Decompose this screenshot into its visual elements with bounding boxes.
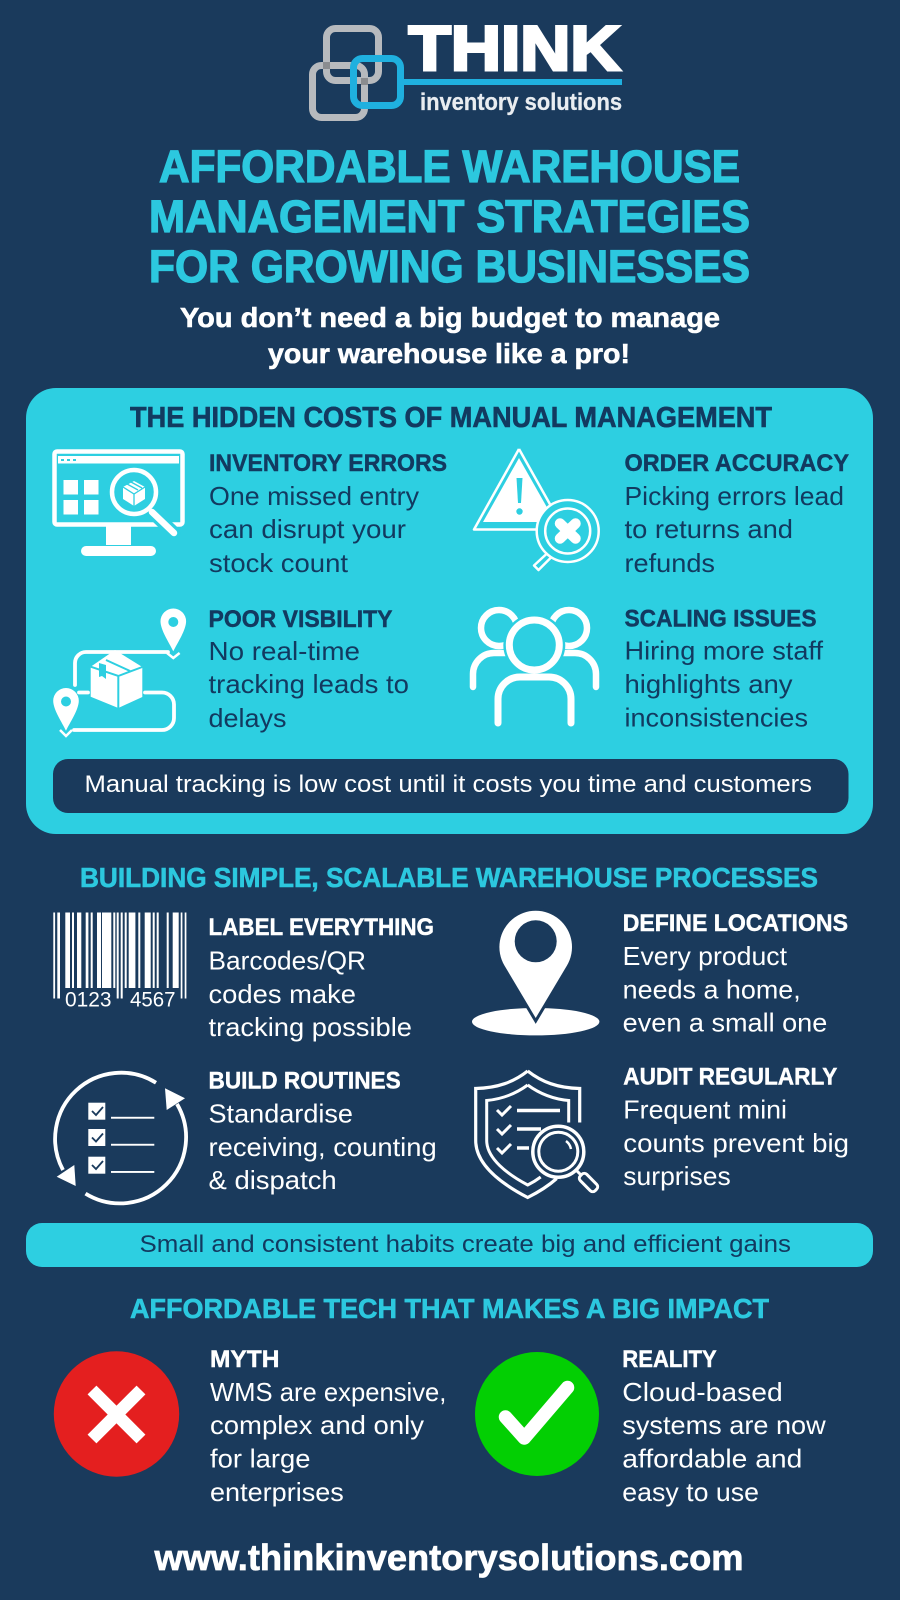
icon: warning triangle with magnifier xyxy=(474,449,599,570)
item: define locations xyxy=(623,910,848,1038)
subtitle: your warehouse like a pro! xyxy=(268,338,630,369)
callout: manual tracking xyxy=(53,759,848,813)
item: reality: REALITY xyxy=(622,1346,717,1373)
logo tagline: inventory solutions xyxy=(420,89,622,116)
item: inventory errors: can disrupt your xyxy=(209,514,406,544)
item: define locations: needs a home, xyxy=(623,974,801,1004)
item: audit regularly: AUDIT REGULARLY xyxy=(623,1064,837,1090)
item: label everything: Barcodes/QR xyxy=(208,946,366,976)
item: myth: WMS are expensive, xyxy=(210,1377,446,1407)
item: scaling issues: highlights any xyxy=(624,669,792,699)
icon: red cross xyxy=(54,1351,179,1477)
icon: barcode: 0123 xyxy=(65,988,112,1012)
item: inventory errors: One missed entry xyxy=(209,481,419,511)
item: order accuracy: Picking errors lead xyxy=(624,481,844,511)
icon: location pin on base xyxy=(472,911,599,1035)
item: reality: easy to use xyxy=(622,1477,759,1507)
subtitle: You don’t need a big budget to manage xyxy=(180,302,720,333)
item: order accuracy: refunds xyxy=(624,548,715,578)
title: AFFORDABLE WAREHOUSE xyxy=(159,141,740,192)
callout: manual tracking: Manual tracking is low cost until it costs you time and customers xyxy=(84,771,812,798)
item: build routines: Standardise xyxy=(208,1098,353,1128)
item: define locations: even a small one xyxy=(623,1008,827,1038)
item: audit regularly xyxy=(623,1064,849,1191)
item: reality xyxy=(622,1346,826,1507)
item: build routines xyxy=(208,1068,437,1195)
callout: small and consistent habits xyxy=(26,1223,873,1267)
item: poor visibility: POOR VISBILITY xyxy=(208,606,392,633)
item: myth: complex and only xyxy=(210,1410,424,1440)
section heading: BUILDING SIMPLE, SCALABLE WAREHOUSE PROCESSES xyxy=(80,862,818,893)
item: label everything xyxy=(208,914,434,1042)
callout: small and consistent habits: Small and consistent habits create big and efficient gains xyxy=(140,1231,791,1258)
item: order accuracy xyxy=(624,450,849,578)
item: inventory errors xyxy=(209,450,447,578)
panel heading: THE HIDDEN COSTS OF MANUAL MANAGEMENT xyxy=(130,402,772,434)
section: affordable tech xyxy=(54,1293,826,1507)
icon: monitor with magnifier xyxy=(54,452,182,556)
item: define locations: Every product xyxy=(623,941,788,971)
title xyxy=(149,141,750,292)
item: inventory errors: INVENTORY ERRORS xyxy=(209,450,447,477)
item: label everything: codes make xyxy=(208,979,356,1009)
section heading: AFFORDABLE TECH THAT MAKES A BIG IMPACT xyxy=(130,1293,769,1324)
title: FOR GROWING BUSINESSES xyxy=(149,241,750,292)
item: poor visibility: delays xyxy=(208,703,286,733)
item: define locations: DEFINE LOCATIONS xyxy=(623,910,848,937)
item: build routines: receiving, counting xyxy=(208,1132,437,1162)
item: reality: affordable and xyxy=(622,1444,802,1474)
icon: group of people xyxy=(473,610,596,723)
item: poor visibility xyxy=(208,606,409,733)
item: reality: Cloud-based xyxy=(622,1377,783,1407)
item: audit regularly: Frequent mini xyxy=(623,1094,787,1124)
item: reality: systems are now xyxy=(622,1410,826,1440)
item: myth xyxy=(210,1346,446,1507)
website URL: www.thinkinventorysolutions.com xyxy=(153,1537,744,1578)
item: build routines: & dispatch xyxy=(208,1165,337,1195)
subtitle xyxy=(180,302,720,369)
item: order accuracy: to returns and xyxy=(624,514,793,544)
icon: shield checklist with magnifier xyxy=(476,1071,599,1198)
logo wordmark: THINK xyxy=(408,14,620,84)
item: myth: enterprises xyxy=(210,1477,344,1507)
item: order accuracy: ORDER ACCURACY xyxy=(624,450,849,477)
item: scaling issues: inconsistencies xyxy=(624,702,808,732)
icon: barcode: 4567 xyxy=(130,988,176,1012)
icon: checklist in cycle arrows xyxy=(55,1073,186,1203)
section: building simple, scalable processes xyxy=(26,862,873,1267)
item: audit regularly: counts prevent big xyxy=(623,1128,849,1158)
item: audit regularly: surprises xyxy=(623,1161,731,1191)
item: myth: MYTH xyxy=(210,1346,280,1373)
item: poor visibility: tracking leads to xyxy=(208,669,409,699)
title: MANAGEMENT STRATEGIES xyxy=(149,191,750,242)
item: scaling issues: SCALING ISSUES xyxy=(624,606,816,632)
item: build routines: BUILD ROUTINES xyxy=(208,1068,401,1094)
logo line xyxy=(403,79,622,85)
item: label everything: tracking possible xyxy=(208,1012,412,1042)
item: myth: for large xyxy=(210,1444,310,1474)
item: scaling issues: Hiring more staff xyxy=(624,636,824,666)
icon: interlocking squares xyxy=(312,28,400,118)
icon: package route with location pins xyxy=(53,608,186,736)
logo: Think Inventory Solutions xyxy=(312,14,622,118)
icon: green check xyxy=(475,1352,599,1476)
item: poor visibility: No real-time xyxy=(208,636,360,666)
item: label everything: LABEL EVERYTHING xyxy=(208,914,434,941)
icon: barcode xyxy=(53,912,186,1012)
panel: hidden costs of manual management xyxy=(26,388,873,834)
item: scaling issues xyxy=(624,606,824,732)
item: inventory errors: stock count xyxy=(209,548,349,578)
